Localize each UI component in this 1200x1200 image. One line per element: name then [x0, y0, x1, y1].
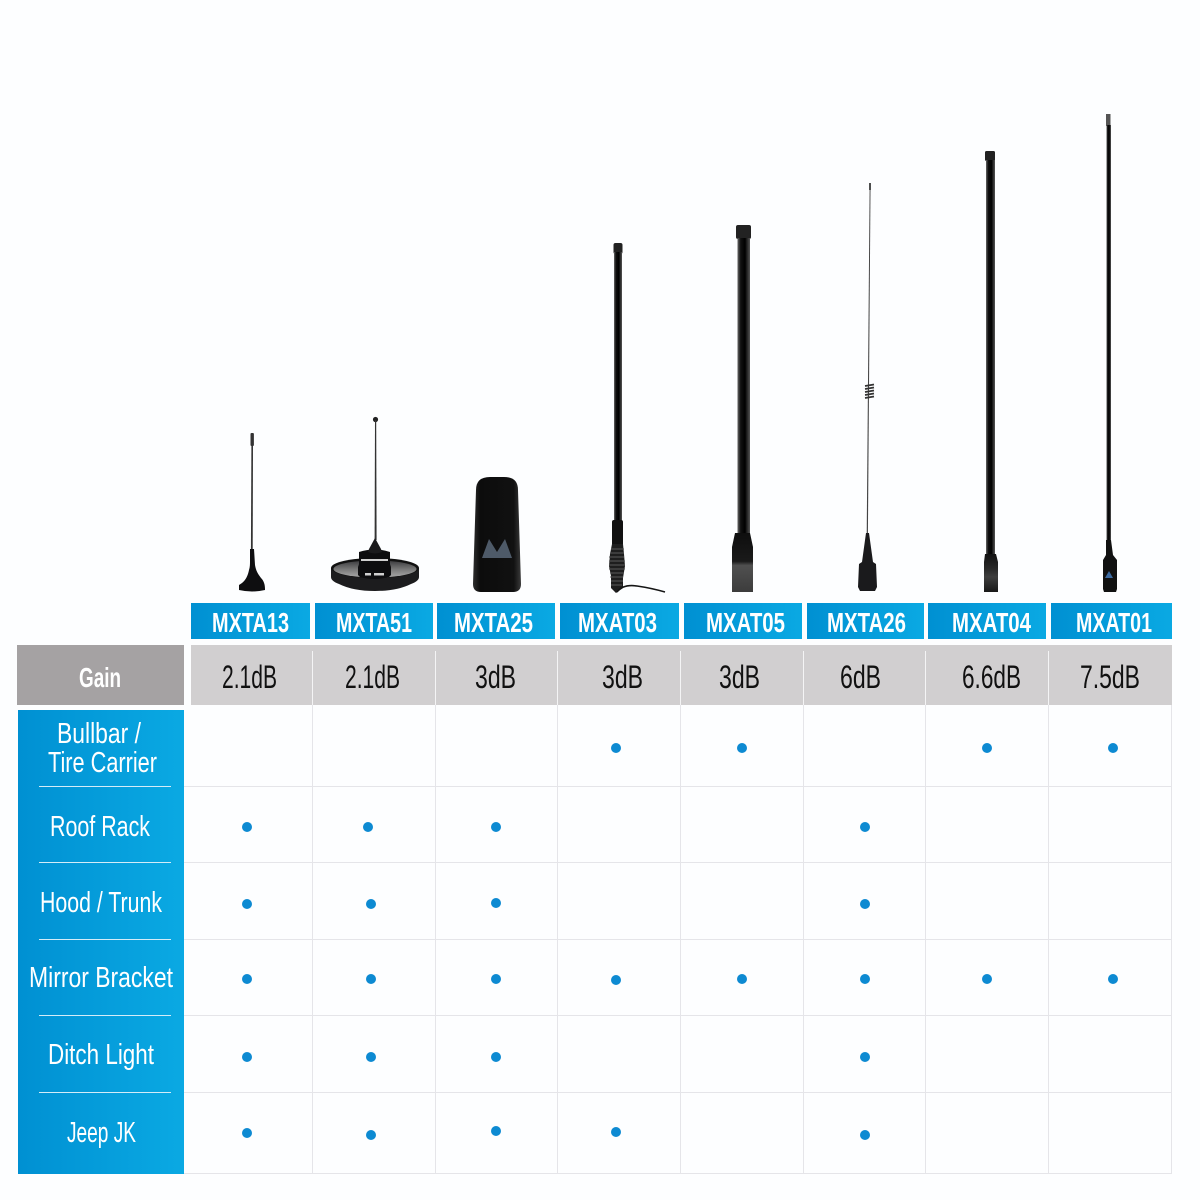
label: Mirror Bracket: Mirror Bracket: [29, 962, 173, 994]
gain row: [17, 645, 1172, 705]
gain values: 7.5dB: [1080, 659, 1140, 695]
gain values: 6dB: [840, 659, 881, 695]
gain values: [191, 645, 1172, 705]
gain values: 3dB: [475, 659, 516, 695]
header: MXTA13: MXTA13: [212, 607, 289, 638]
header: MXAT01: [1051, 603, 1172, 639]
label: Bullbar / Tire Carrier: [48, 718, 157, 779]
antenna: MXAT01: [1103, 114, 1117, 592]
header: MXAT03: MXAT03: [578, 607, 657, 638]
antenna: MXAT03: [609, 243, 665, 593]
label: Roof Rack: Roof Rack: [50, 811, 150, 843]
antenna: MXTA51: [331, 417, 419, 591]
gain values: 6.6dB: [962, 659, 1021, 695]
row dots: Ditch Light: [242, 1052, 870, 1062]
header: MXAT04: MXAT04: [952, 607, 1031, 638]
compatibility dots: [242, 743, 1118, 1140]
label: Ditch Light: Ditch Light: [48, 1039, 154, 1071]
row dots: Jeep JK: [242, 1126, 870, 1140]
header: MXAT04: [928, 603, 1046, 639]
gain values: 2.1dB: [345, 659, 400, 695]
antenna: MXTA26: [858, 183, 877, 591]
header: MXTA51: MXTA51: [336, 607, 412, 638]
row dots: Bullbar / Tire Carrier: [611, 743, 1118, 753]
table grid: [184, 705, 1172, 1174]
antenna: MXTA13: [239, 433, 265, 592]
label: Bullbar / Tire Carrier: Tire Carrier: [48, 747, 157, 779]
coil: [865, 384, 874, 398]
antenna: MXTA25: [473, 477, 521, 592]
header: MXTA25: MXTA25: [454, 607, 533, 638]
gain values: 3dB: [719, 659, 760, 695]
label: Hood / Trunk: Hood / Trunk: [40, 887, 162, 919]
model header row: [191, 603, 1172, 639]
antenna: MXAT04: [984, 151, 998, 592]
header: MXTA26: [807, 603, 924, 639]
header: MXAT01: MXAT01: [1076, 607, 1152, 638]
header: MXTA13: [191, 603, 310, 639]
row dots: Hood / Trunk: [242, 898, 870, 909]
label: Jeep JK: Jeep JK: [67, 1117, 136, 1149]
header: MXTA26: MXTA26: [827, 607, 906, 638]
gain label: Gain: [79, 662, 121, 693]
antenna: MXAT05: [732, 225, 753, 592]
header: MXTA25: [437, 603, 555, 639]
row dots: Roof Rack: [242, 822, 870, 832]
gain values: 3dB: [602, 659, 643, 695]
header: MXAT03: [560, 603, 679, 639]
logo mark: [482, 539, 512, 558]
row dots: Mirror Bracket: [242, 974, 1118, 985]
label: Bullbar / Tire Carrier: Bullbar /: [57, 718, 142, 750]
gain values: 2.1dB: [222, 659, 277, 695]
gain label: [17, 645, 184, 705]
mounting type column: [18, 710, 184, 1174]
header: MXTA51: [315, 603, 433, 639]
header: MXAT05: [684, 603, 802, 639]
header: MXAT05: MXAT05: [706, 607, 785, 638]
